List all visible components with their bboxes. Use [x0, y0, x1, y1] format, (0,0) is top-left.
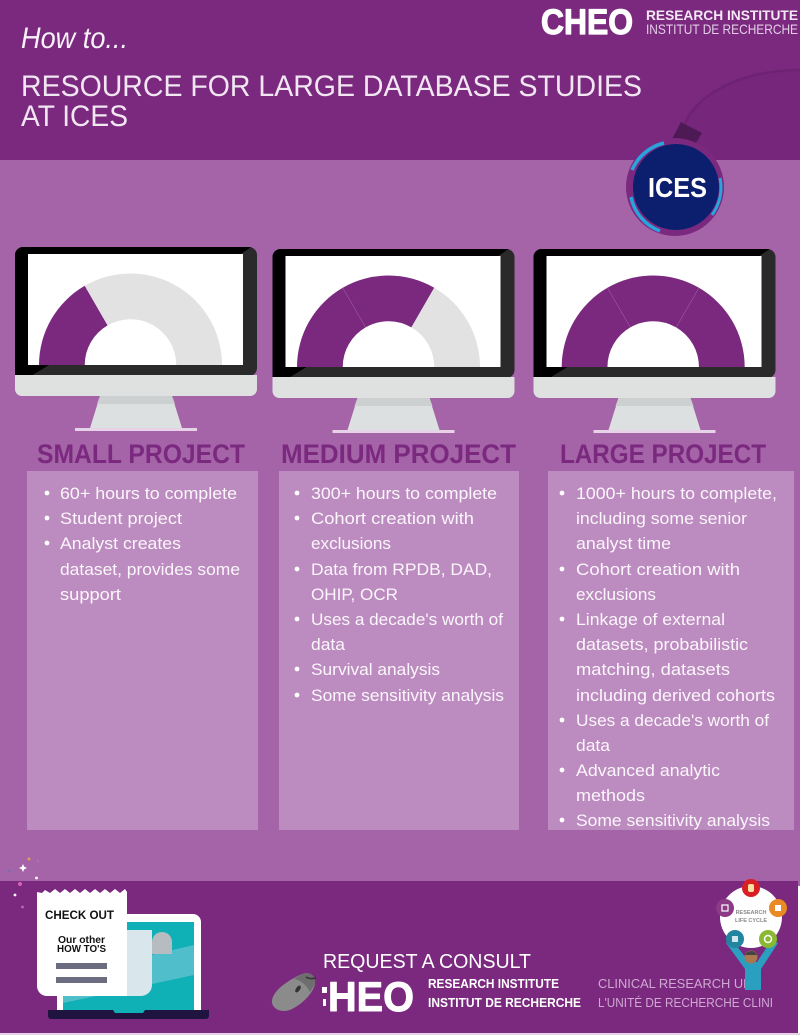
panel: large project details: exclusions: [576, 585, 656, 604]
logo: footer CHEO Research Institute: HEO: [328, 973, 414, 1020]
panel: large project details: Advanced analytic: [576, 761, 721, 780]
footer band: [0, 881, 800, 1035]
clinical research unit text: CLINICAL RESEARCH UNI: [598, 976, 756, 991]
clinical research unit text: [598, 976, 773, 1010]
panel: medium project details: Some sensitivity analysis: [311, 686, 504, 705]
logo: CHEO Research Institute: CHEO: [541, 3, 633, 42]
title line 2: AT ICES: [21, 100, 128, 133]
subtitle: how to: How to...: [21, 22, 128, 55]
header band: [0, 0, 800, 160]
call to action: request a consult: REQUEST A CONSULT: [323, 951, 531, 973]
gauge: all three segments filled: [562, 276, 745, 367]
gauge: one of three segments filled: [39, 274, 222, 365]
logo: CHEO Research Institute: RESEARCH INSTITUTE: [646, 7, 798, 23]
icon: person holding research life cycle: LIFE CYCLE: [735, 918, 767, 924]
panel: small project details: Student project: [60, 509, 182, 528]
panel: large project details: 1000+ hours to complete,: [576, 484, 777, 503]
logo: footer CHEO Research Institute: INSTITUT DE RECHERCHE: [428, 995, 581, 1010]
panel: medium project details: Survival analysis: [311, 660, 440, 679]
icon: person holding research life cycle: [716, 879, 787, 990]
panel: large project details: matching, datasets: [576, 660, 730, 679]
panel: large project details: methods: [576, 786, 645, 805]
panel: medium project monitor: [272, 249, 514, 433]
panel: medium project details: 300+ hours to complete: [311, 484, 497, 503]
panel: medium project details: Cohort creation with: [311, 509, 474, 528]
panel: medium project details: exclusions: [311, 534, 391, 553]
receipt: HOW TO'S: [57, 944, 106, 955]
panel: large project details: Uses a decade's worth of: [576, 711, 769, 730]
title line 1: RESOURCE FOR LARGE DATABASE STUDIES: [21, 70, 642, 103]
logo: footer CHEO Research Institute: RESEARCH INSTITUTE: [428, 976, 559, 991]
receipt text: CHECK OUT: [45, 908, 115, 922]
panel: small project details: Analyst creates: [60, 534, 181, 553]
panel: large project details: Linkage of external: [576, 610, 725, 629]
panel: small project details: support: [60, 585, 121, 604]
panel: medium project details: [279, 471, 519, 830]
panel: medium project details: data: [311, 635, 346, 654]
icon: laptop with receipt: [37, 889, 209, 1019]
logo: footer CHEO Research Institute: [322, 973, 581, 1020]
panel: large project details: Some sensitivity analysis: [576, 811, 770, 830]
heading: large project: LARGE PROJECT: [560, 439, 766, 469]
receipt: [37, 889, 127, 996]
icon: computer mouse: [272, 973, 316, 1011]
icon: person holding research life cycle: RESEARCH: [736, 910, 766, 916]
receipt: Our other: [58, 935, 105, 946]
panel: large project details: Cohort creation with: [576, 560, 740, 579]
panel: small project monitor: [15, 247, 257, 431]
panel: large project details: [548, 471, 794, 830]
gauge: two of three segments filled: [297, 276, 480, 367]
panel: large project details: datasets, probabilistic: [576, 635, 749, 654]
panel: small project details: dataset, provides some: [60, 560, 240, 579]
panel: small project details: 60+ hours to complete: [60, 484, 237, 503]
icon: ICES badge: ICES: [648, 172, 707, 203]
panel: large project details: analyst time: [576, 534, 671, 553]
panel: medium project details: Data from RPDB, DAD,: [311, 560, 492, 579]
heading: small project: SMALL PROJECT: [37, 439, 245, 469]
panel: large project details: including some senior: [576, 509, 747, 528]
panel: medium project details: OHIP, OCR: [311, 585, 398, 604]
sparkles: [8, 858, 39, 908]
panel: large project details: including derived cohorts: [576, 686, 775, 705]
clinical research unit text: L'UNITÉ DE RECHERCHE CLINI: [598, 995, 773, 1010]
panel: large project details: data: [576, 736, 611, 755]
logo: CHEO Research Institute: [541, 3, 798, 42]
heading: medium project: MEDIUM PROJECT: [281, 439, 516, 469]
panel: medium project details: Uses a decade's worth of: [311, 610, 503, 629]
icon: ICES badge: [626, 122, 724, 236]
panel: large project monitor: [534, 249, 776, 433]
title: [21, 22, 642, 133]
panel: small project details: [27, 471, 258, 830]
